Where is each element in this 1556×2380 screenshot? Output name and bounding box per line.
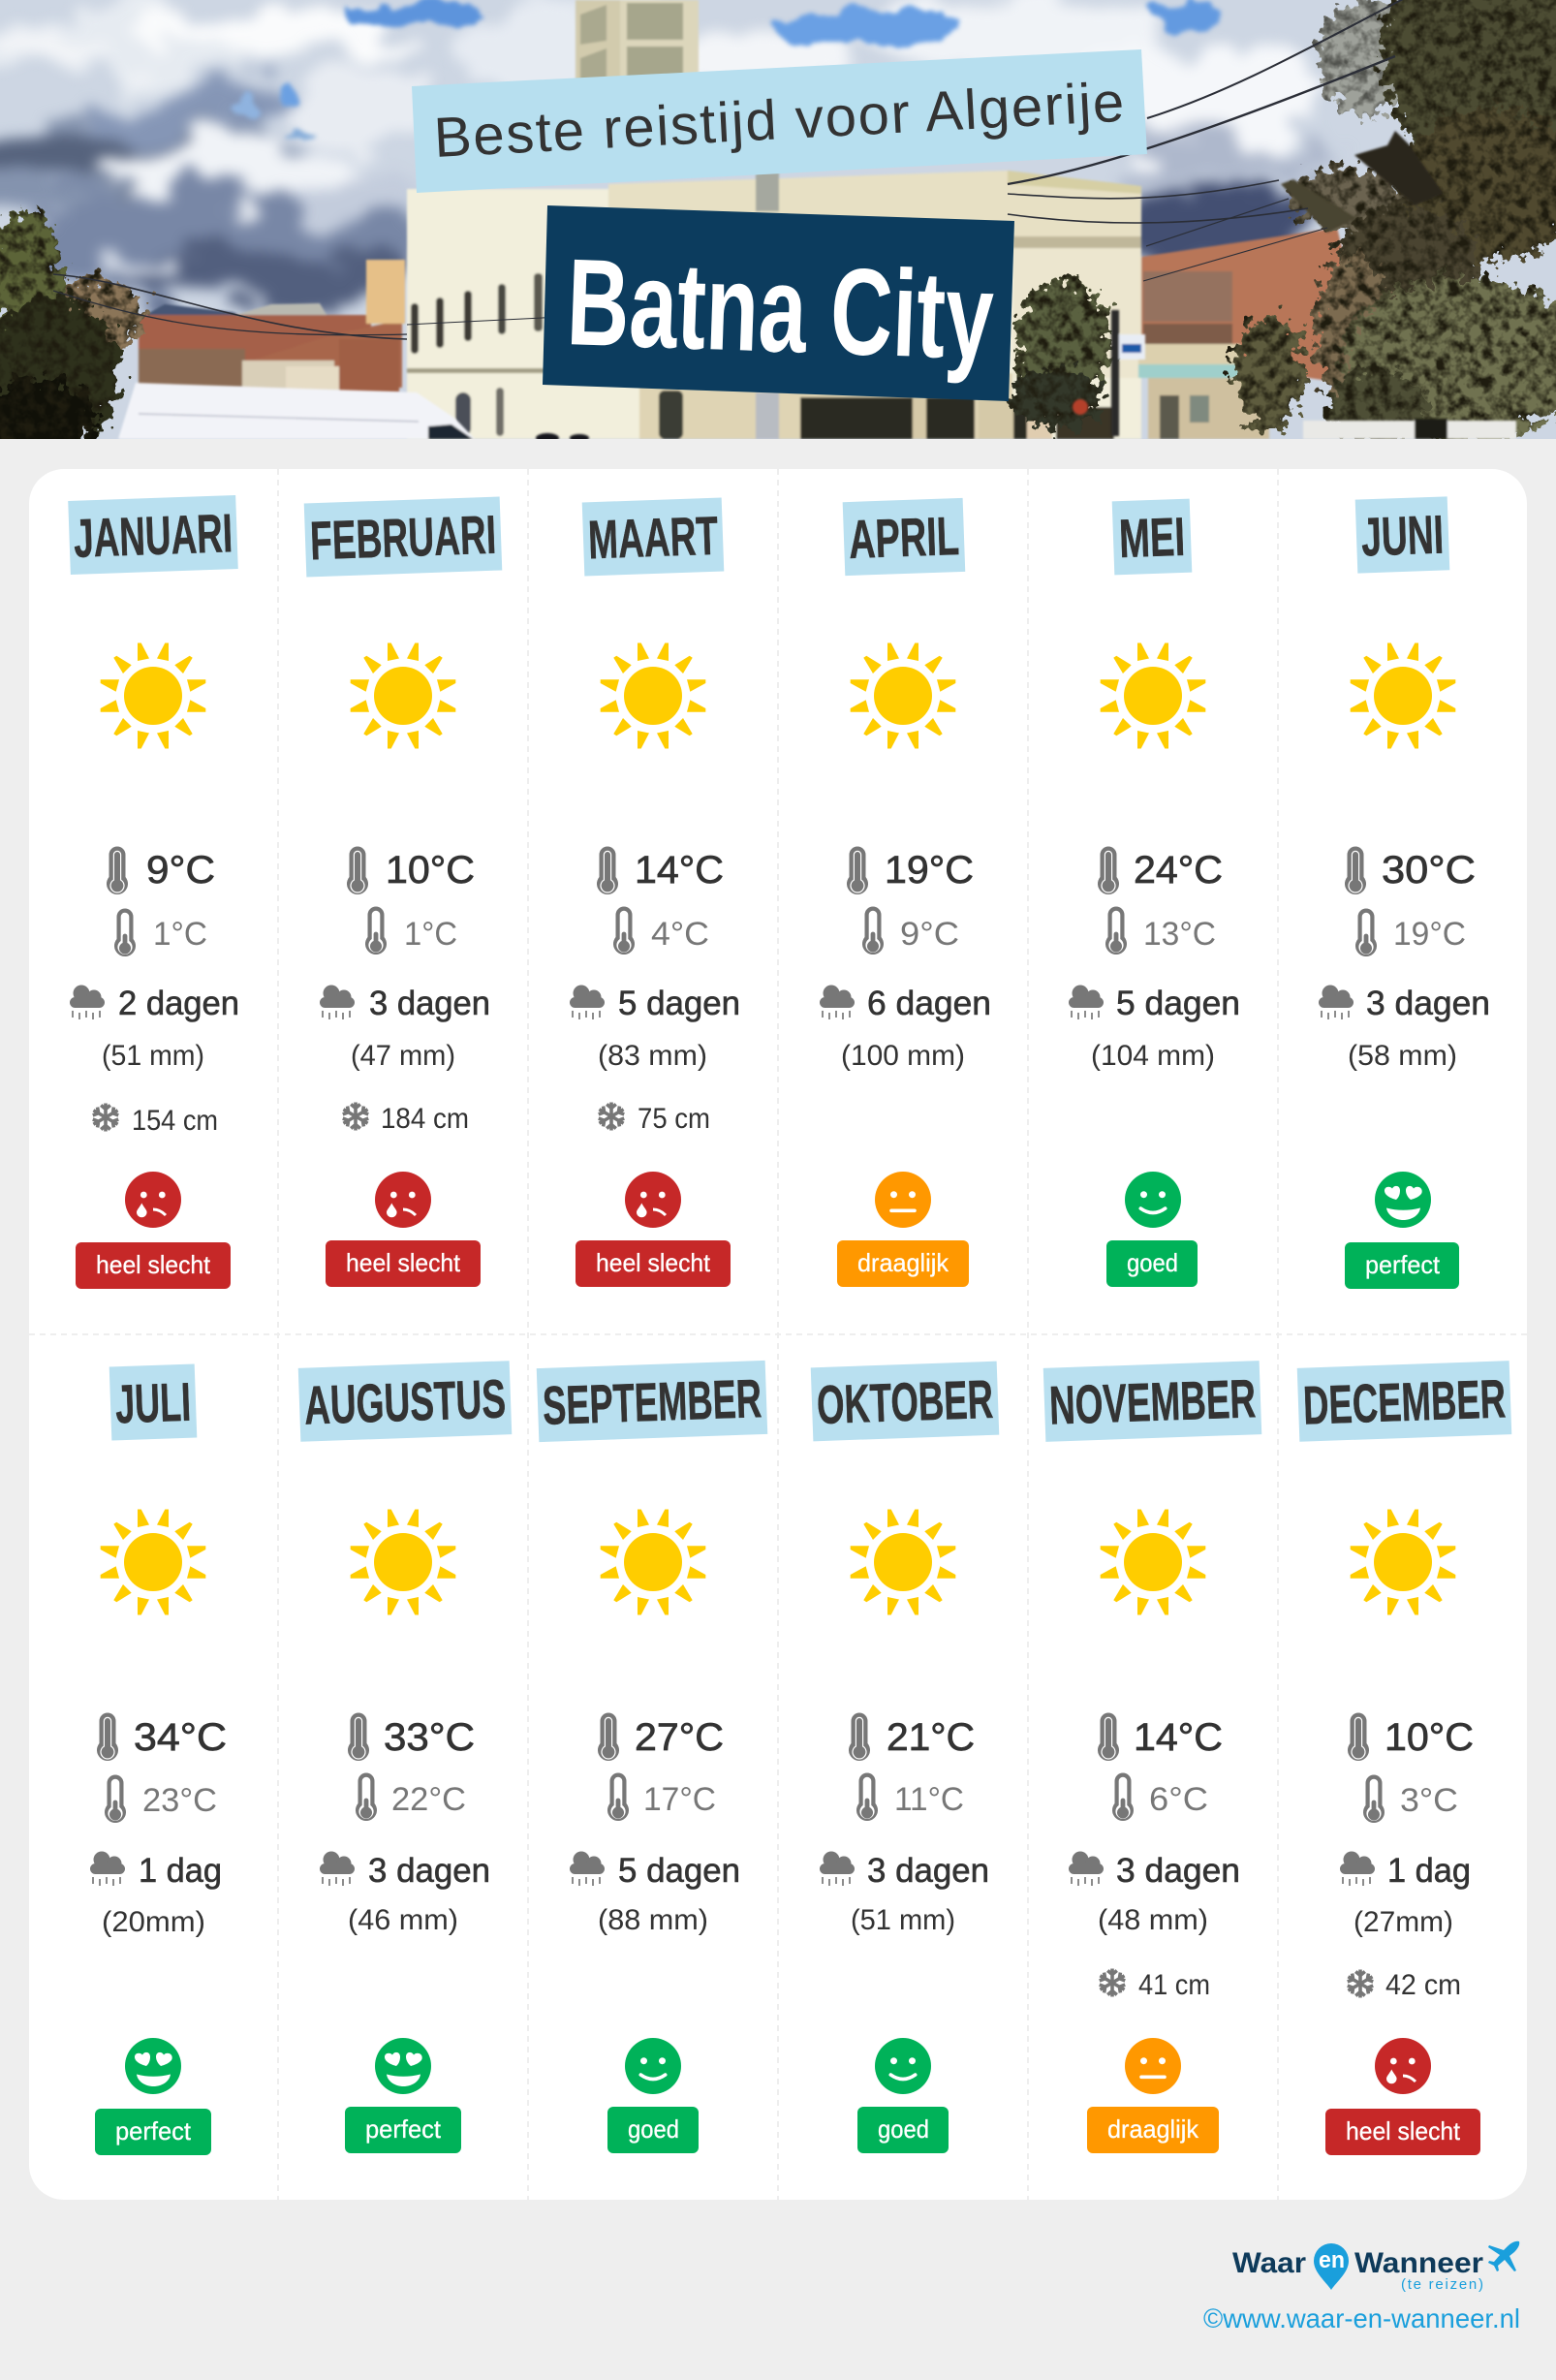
icon: sun bbox=[1101, 643, 1205, 748]
foliage with noise texture bbox=[0, 0, 1556, 465]
icon: rain bbox=[90, 1851, 125, 1886]
icon: rating face bbox=[1375, 2038, 1431, 2094]
title banner: Beste reistijd voor Algerije: Beste reistijd voor Algerije bbox=[432, 71, 1126, 170]
high temperature: 14°C bbox=[635, 849, 724, 892]
high temperature: 30°C bbox=[1382, 849, 1476, 892]
panel: september bbox=[537, 1361, 767, 2153]
rating label: heel slecht bbox=[96, 1250, 211, 1279]
people bbox=[536, 433, 559, 443]
icon: sun bbox=[601, 643, 705, 748]
rainfall: (46 mm) bbox=[348, 1904, 458, 1936]
heading: september: SEPTEMBER bbox=[542, 1367, 762, 1436]
high temperature: 33°C bbox=[384, 1716, 475, 1759]
rating label bbox=[1106, 1240, 1198, 1287]
icon: thermometer high bbox=[1098, 847, 1119, 894]
wires bbox=[53, 0, 1405, 339]
panel: maart bbox=[570, 498, 740, 1287]
rain days: 3 dagen bbox=[368, 1852, 490, 1890]
rainfall: (104 mm) bbox=[1091, 1040, 1215, 1072]
rain days: 5 dagen bbox=[618, 985, 740, 1022]
white wall, right bbox=[1303, 421, 1516, 439]
panel: april bbox=[820, 498, 991, 1287]
high temperature: 21°C bbox=[887, 1716, 975, 1759]
rain days: 3 dagen bbox=[1366, 985, 1490, 1022]
icon: thermometer low bbox=[862, 907, 884, 955]
icon: sun bbox=[601, 1510, 705, 1614]
icon: thermometer low bbox=[365, 907, 387, 955]
heading: november: NOVEMBER bbox=[1048, 1367, 1257, 1436]
rating label: heel slecht bbox=[596, 1248, 711, 1277]
icon: thermometer high bbox=[1098, 1713, 1119, 1761]
rating label: heel slecht bbox=[346, 1248, 461, 1277]
rain days: 3 dagen bbox=[1116, 1852, 1240, 1890]
high temperature: 34°C bbox=[134, 1716, 227, 1759]
rating label: heel slecht bbox=[1346, 2116, 1461, 2145]
heading: maart: MAART bbox=[587, 505, 719, 570]
rainfall: (51 mm) bbox=[102, 1040, 204, 1072]
panel: oktober bbox=[811, 1362, 999, 2153]
panel: juli bbox=[90, 1363, 227, 2155]
icon: sun bbox=[1351, 643, 1455, 748]
high temperature: 14°C bbox=[1134, 1716, 1223, 1759]
icon: sun bbox=[351, 1510, 455, 1614]
heading: oktober: OKTOBER bbox=[816, 1368, 994, 1435]
icon: snow bbox=[1346, 1969, 1375, 1998]
icon: snow bbox=[1098, 1969, 1127, 1996]
icon: thermometer low bbox=[1112, 1773, 1134, 1821]
icon: sun bbox=[351, 643, 455, 748]
icon: thermometer high bbox=[1345, 847, 1366, 894]
high temperature: 10°C bbox=[1385, 1716, 1474, 1759]
brick building right bbox=[1139, 229, 1343, 382]
icon: thermometer low bbox=[613, 907, 635, 955]
icon: sun bbox=[1101, 1510, 1205, 1614]
icon: thermometer high bbox=[107, 847, 128, 894]
logo: Waar en Wanneer: Wanneer bbox=[1354, 2247, 1483, 2279]
windows bbox=[411, 303, 419, 354]
rating label bbox=[1087, 2107, 1219, 2153]
title banner: Batna City: Batna City bbox=[565, 233, 996, 385]
panel: climate calendar card bbox=[29, 469, 1527, 2200]
icon: thermometer low bbox=[356, 1773, 377, 1821]
rain days: 5 dagen bbox=[1116, 985, 1240, 1022]
mosque body bbox=[407, 189, 1141, 439]
panel: december bbox=[1297, 1361, 1511, 2155]
rain days: 5 dagen bbox=[618, 1852, 740, 1890]
rainfall: (47 mm) bbox=[351, 1040, 455, 1072]
icon: rating face bbox=[125, 1172, 181, 1228]
panel: november bbox=[1043, 1361, 1261, 2153]
icon: thermometer low bbox=[105, 1775, 126, 1823]
rating label bbox=[76, 1242, 231, 1289]
icon: rating face bbox=[625, 2038, 681, 2094]
icon: thermometer high bbox=[97, 1713, 118, 1761]
snowfall: 154 cm bbox=[132, 1105, 218, 1137]
high temperature: 24°C bbox=[1134, 849, 1223, 892]
rating label: goed bbox=[878, 2114, 929, 2144]
icon: rating face bbox=[625, 1172, 681, 1228]
rainfall: (100 mm) bbox=[841, 1040, 965, 1072]
logo: Waar en Wanneer: en bbox=[1319, 2247, 1345, 2273]
rating label bbox=[95, 2109, 211, 2155]
icon: thermometer low bbox=[114, 909, 136, 956]
rainfall: (83 mm) bbox=[598, 1040, 707, 1072]
icon: rain bbox=[320, 985, 355, 1019]
icon: rain bbox=[570, 985, 605, 1019]
low temperature: 1°C bbox=[153, 916, 207, 953]
icon: thermometer high bbox=[847, 847, 868, 894]
heading: mei bbox=[1112, 499, 1192, 575]
icon: rain bbox=[570, 1851, 605, 1886]
rain days: 1 dag bbox=[139, 1852, 222, 1890]
left tree bbox=[39, 278, 145, 352]
icon: rating face bbox=[875, 2038, 931, 2094]
rating label: goed bbox=[628, 2114, 679, 2144]
rating label bbox=[837, 1240, 969, 1287]
icon: rating face bbox=[1375, 1172, 1431, 1228]
hero photo: street with mosque under cloudy sky bbox=[0, 0, 1556, 465]
icon: rain bbox=[70, 985, 105, 1019]
bush bbox=[1234, 315, 1304, 431]
heading: januari: JANUARI bbox=[73, 502, 233, 569]
logo: Waar en Wanneer: Waar bbox=[1232, 2247, 1306, 2279]
heading: juli: JULI bbox=[114, 1371, 192, 1434]
icon: rain bbox=[1340, 1851, 1375, 1886]
rainfall: (20mm) bbox=[102, 1906, 205, 1938]
panel: augustus bbox=[298, 1361, 512, 2153]
rating label bbox=[607, 2107, 699, 2153]
low temperature: 1°C bbox=[404, 916, 457, 953]
low temperature: 17°C bbox=[643, 1781, 716, 1818]
sign post bbox=[1111, 310, 1119, 436]
cut tree trunk bbox=[1354, 131, 1444, 205]
rain days: 2 dagen bbox=[118, 985, 239, 1022]
heading: augustus: AUGUSTUS bbox=[303, 1367, 507, 1436]
icon: rain bbox=[1069, 985, 1104, 1019]
right tree bbox=[1318, 0, 1415, 116]
title banner: Batna City bbox=[543, 205, 1014, 401]
rating label bbox=[326, 1240, 481, 1287]
heading: april: APRIL bbox=[848, 505, 960, 570]
icon: thermometer high bbox=[1348, 1713, 1369, 1761]
snowfall: 75 cm bbox=[638, 1103, 710, 1135]
icon: sun bbox=[851, 1510, 955, 1614]
icon: rain bbox=[1319, 985, 1354, 1019]
icon: rating face bbox=[375, 2038, 431, 2094]
icon: rain bbox=[1069, 1851, 1104, 1886]
heading: juni bbox=[1355, 496, 1449, 574]
icon: snow bbox=[91, 1103, 120, 1132]
title banner: Beste reistijd voor Algerije bbox=[412, 49, 1147, 193]
icon: rain bbox=[320, 1851, 355, 1886]
snowfall: 42 cm bbox=[1385, 1969, 1461, 2001]
rainfall: (51 mm) bbox=[851, 1904, 955, 1936]
icon: map pin bbox=[1314, 2243, 1349, 2290]
heading: juli bbox=[109, 1363, 197, 1441]
heading: maart bbox=[582, 498, 724, 576]
palm tree bbox=[1015, 279, 1112, 399]
source url: ©www.waar-en-wanneer.nl bbox=[1203, 2303, 1520, 2333]
rating label: perfect bbox=[365, 2114, 442, 2144]
low temperature: 22°C bbox=[391, 1781, 466, 1818]
heading: oktober bbox=[811, 1362, 999, 1441]
panel: juni bbox=[1319, 496, 1490, 1289]
rain days: 1 dag bbox=[1387, 1852, 1471, 1890]
low temperature: 13°C bbox=[1143, 916, 1216, 953]
rating label: draaglijk bbox=[1107, 2114, 1199, 2144]
icon: thermometer high bbox=[348, 1713, 369, 1761]
icon: rating face bbox=[875, 1172, 931, 1228]
panel: januari bbox=[68, 495, 239, 1289]
icon: thermometer low bbox=[856, 1773, 878, 1821]
low temperature: 4°C bbox=[651, 916, 709, 953]
low temperature: 6°C bbox=[1149, 1781, 1208, 1818]
high temperature: 10°C bbox=[386, 849, 475, 892]
rating label: perfect bbox=[115, 2116, 192, 2145]
rain days: 3 dagen bbox=[369, 985, 490, 1022]
icon: rain bbox=[820, 1851, 855, 1886]
icon: thermometer high bbox=[347, 847, 368, 894]
icon: sun bbox=[851, 643, 955, 748]
low temperature: 23°C bbox=[142, 1782, 217, 1819]
rating label bbox=[1345, 1242, 1459, 1289]
rainfall: (27mm) bbox=[1354, 1906, 1453, 1938]
icon: thermometer low bbox=[1355, 909, 1377, 956]
icon: snow bbox=[341, 1103, 370, 1130]
heading: juni: JUNI bbox=[1360, 504, 1445, 567]
icon: thermometer low bbox=[607, 1773, 629, 1821]
rainfall: (88 mm) bbox=[598, 1904, 708, 1936]
rating label bbox=[345, 2107, 461, 2153]
rain days: 3 dagen bbox=[867, 1852, 989, 1890]
rating label: perfect bbox=[1365, 1250, 1441, 1279]
heading: mei: MEI bbox=[1118, 506, 1186, 569]
panel: mei bbox=[1069, 499, 1240, 1287]
heading: augustus bbox=[298, 1361, 512, 1442]
heading: april bbox=[843, 498, 965, 576]
snowfall: 41 cm bbox=[1138, 1969, 1210, 2001]
rating label bbox=[857, 2107, 949, 2153]
snowfall: 184 cm bbox=[381, 1103, 469, 1135]
icon: thermometer low bbox=[1363, 1775, 1385, 1823]
high temperature: 19°C bbox=[885, 849, 974, 892]
icon: thermometer high bbox=[598, 1713, 619, 1761]
rain days: 6 dagen bbox=[867, 985, 991, 1022]
rainfall: (48 mm) bbox=[1098, 1904, 1208, 1936]
panel: februari bbox=[304, 496, 502, 1287]
rating label: draaglijk bbox=[857, 1248, 949, 1277]
heading: februari bbox=[304, 496, 502, 578]
icon: thermometer high bbox=[849, 1713, 870, 1761]
low temperature: 11°C bbox=[894, 1781, 964, 1818]
icon: sun bbox=[101, 1510, 205, 1614]
icon: sun bbox=[101, 643, 205, 748]
logo: Waar en Wanneer: (te reizen) bbox=[1401, 2276, 1483, 2293]
low temperature: 19°C bbox=[1393, 916, 1466, 953]
icon: sun bbox=[1351, 1510, 1455, 1614]
street light pole bbox=[756, 172, 779, 211]
icon: snow bbox=[597, 1103, 626, 1130]
heading: februari: FEBRUARI bbox=[309, 504, 497, 571]
fence and hedges bbox=[659, 391, 683, 439]
heading: november bbox=[1043, 1361, 1261, 1442]
tower bbox=[619, 0, 700, 76]
icon: thermometer high bbox=[597, 847, 618, 894]
logo: Waar en Wanneer bbox=[1232, 2241, 1519, 2293]
heading: september bbox=[537, 1361, 767, 1442]
low temperature: 3°C bbox=[1400, 1782, 1458, 1819]
distant hills and buildings, left bbox=[145, 304, 242, 316]
icon: rating face bbox=[125, 2038, 181, 2094]
icon: rating face bbox=[375, 1172, 431, 1228]
low temperature: 9°C bbox=[900, 916, 959, 953]
rainfall: (58 mm) bbox=[1348, 1040, 1457, 1072]
icon: thermometer low bbox=[1105, 907, 1127, 955]
high temperature: 9°C bbox=[146, 849, 215, 892]
high temperature: 27°C bbox=[635, 1716, 724, 1759]
icon: airplane bbox=[1488, 2241, 1519, 2271]
icon: rain bbox=[820, 985, 855, 1019]
white van bbox=[118, 383, 475, 439]
rating label bbox=[1325, 2109, 1480, 2155]
rating label: goed bbox=[1127, 1248, 1178, 1277]
icon: rating face bbox=[1125, 1172, 1181, 1228]
rating label bbox=[576, 1240, 731, 1287]
heading: januari bbox=[68, 495, 238, 575]
icon: rating face bbox=[1125, 2038, 1181, 2094]
